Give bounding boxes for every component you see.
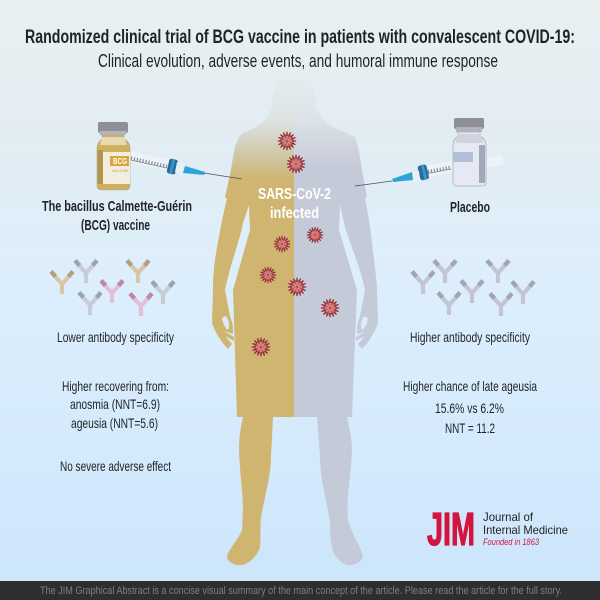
human silhouette xyxy=(212,78,378,565)
icon: BCG vial: VACCINE xyxy=(112,168,129,173)
center label: SARS-CoV-2 infected: SARS-CoV-2 xyxy=(258,186,331,203)
center label: SARS-CoV-2 infected: infected xyxy=(270,205,319,222)
logo: Journal of Internal Medicine: Internal Medicine xyxy=(483,523,568,537)
text: late ageusia: 15.6% vs 6.2% xyxy=(435,400,504,416)
virus particles xyxy=(252,132,339,356)
icon: placebo syringe and needle xyxy=(355,160,455,186)
heading: BCG vaccine arm xyxy=(42,198,192,234)
logo: Journal of Internal Medicine xyxy=(427,503,568,555)
text: lower antibody specificity: Lower antibody specificity xyxy=(57,329,174,345)
icon: BCG vial: BCG xyxy=(113,157,127,166)
body left half: BCG xyxy=(212,78,294,565)
heading: BCG vaccine arm: The bacillus Calmette-Guérin xyxy=(42,198,192,215)
text: late ageusia: Higher chance of late ageusia xyxy=(403,378,537,394)
center label: SARS-CoV-2 infected xyxy=(258,186,331,222)
logo: Journal of Internal Medicine: Founded in 1863 xyxy=(483,537,539,547)
text: recovery outcomes xyxy=(62,378,169,431)
footer bar xyxy=(0,581,600,600)
icon: BCG syringe and needle xyxy=(128,151,242,179)
text: adverse effects: No severe adverse effect xyxy=(60,458,171,474)
text: late ageusia xyxy=(403,378,537,436)
icon: placebo vial xyxy=(453,118,504,186)
body right half: placebo xyxy=(294,78,378,565)
text: recovery outcomes: Higher recovering from: xyxy=(62,378,169,394)
icon: uniform antibodies xyxy=(412,260,534,316)
logo: Journal of Internal Medicine: JIM xyxy=(427,503,475,555)
text: recovery outcomes: ageusia (NNT=5.6) xyxy=(71,415,158,431)
text: higher antibody specificity: Higher antibody specificity xyxy=(410,329,530,345)
heading: placebo arm: Placebo xyxy=(450,199,490,216)
icon: mixed antibodies xyxy=(51,260,174,316)
heading: BCG vaccine arm: (BCG) vaccine xyxy=(81,217,150,234)
text: late ageusia: NNT = 11.2 xyxy=(445,420,495,436)
logo: Journal of Internal Medicine: Journal of xyxy=(483,510,534,524)
text: recovery outcomes: anosmia (NNT=6.9) xyxy=(70,396,160,412)
icon: BCG vial xyxy=(97,122,130,190)
